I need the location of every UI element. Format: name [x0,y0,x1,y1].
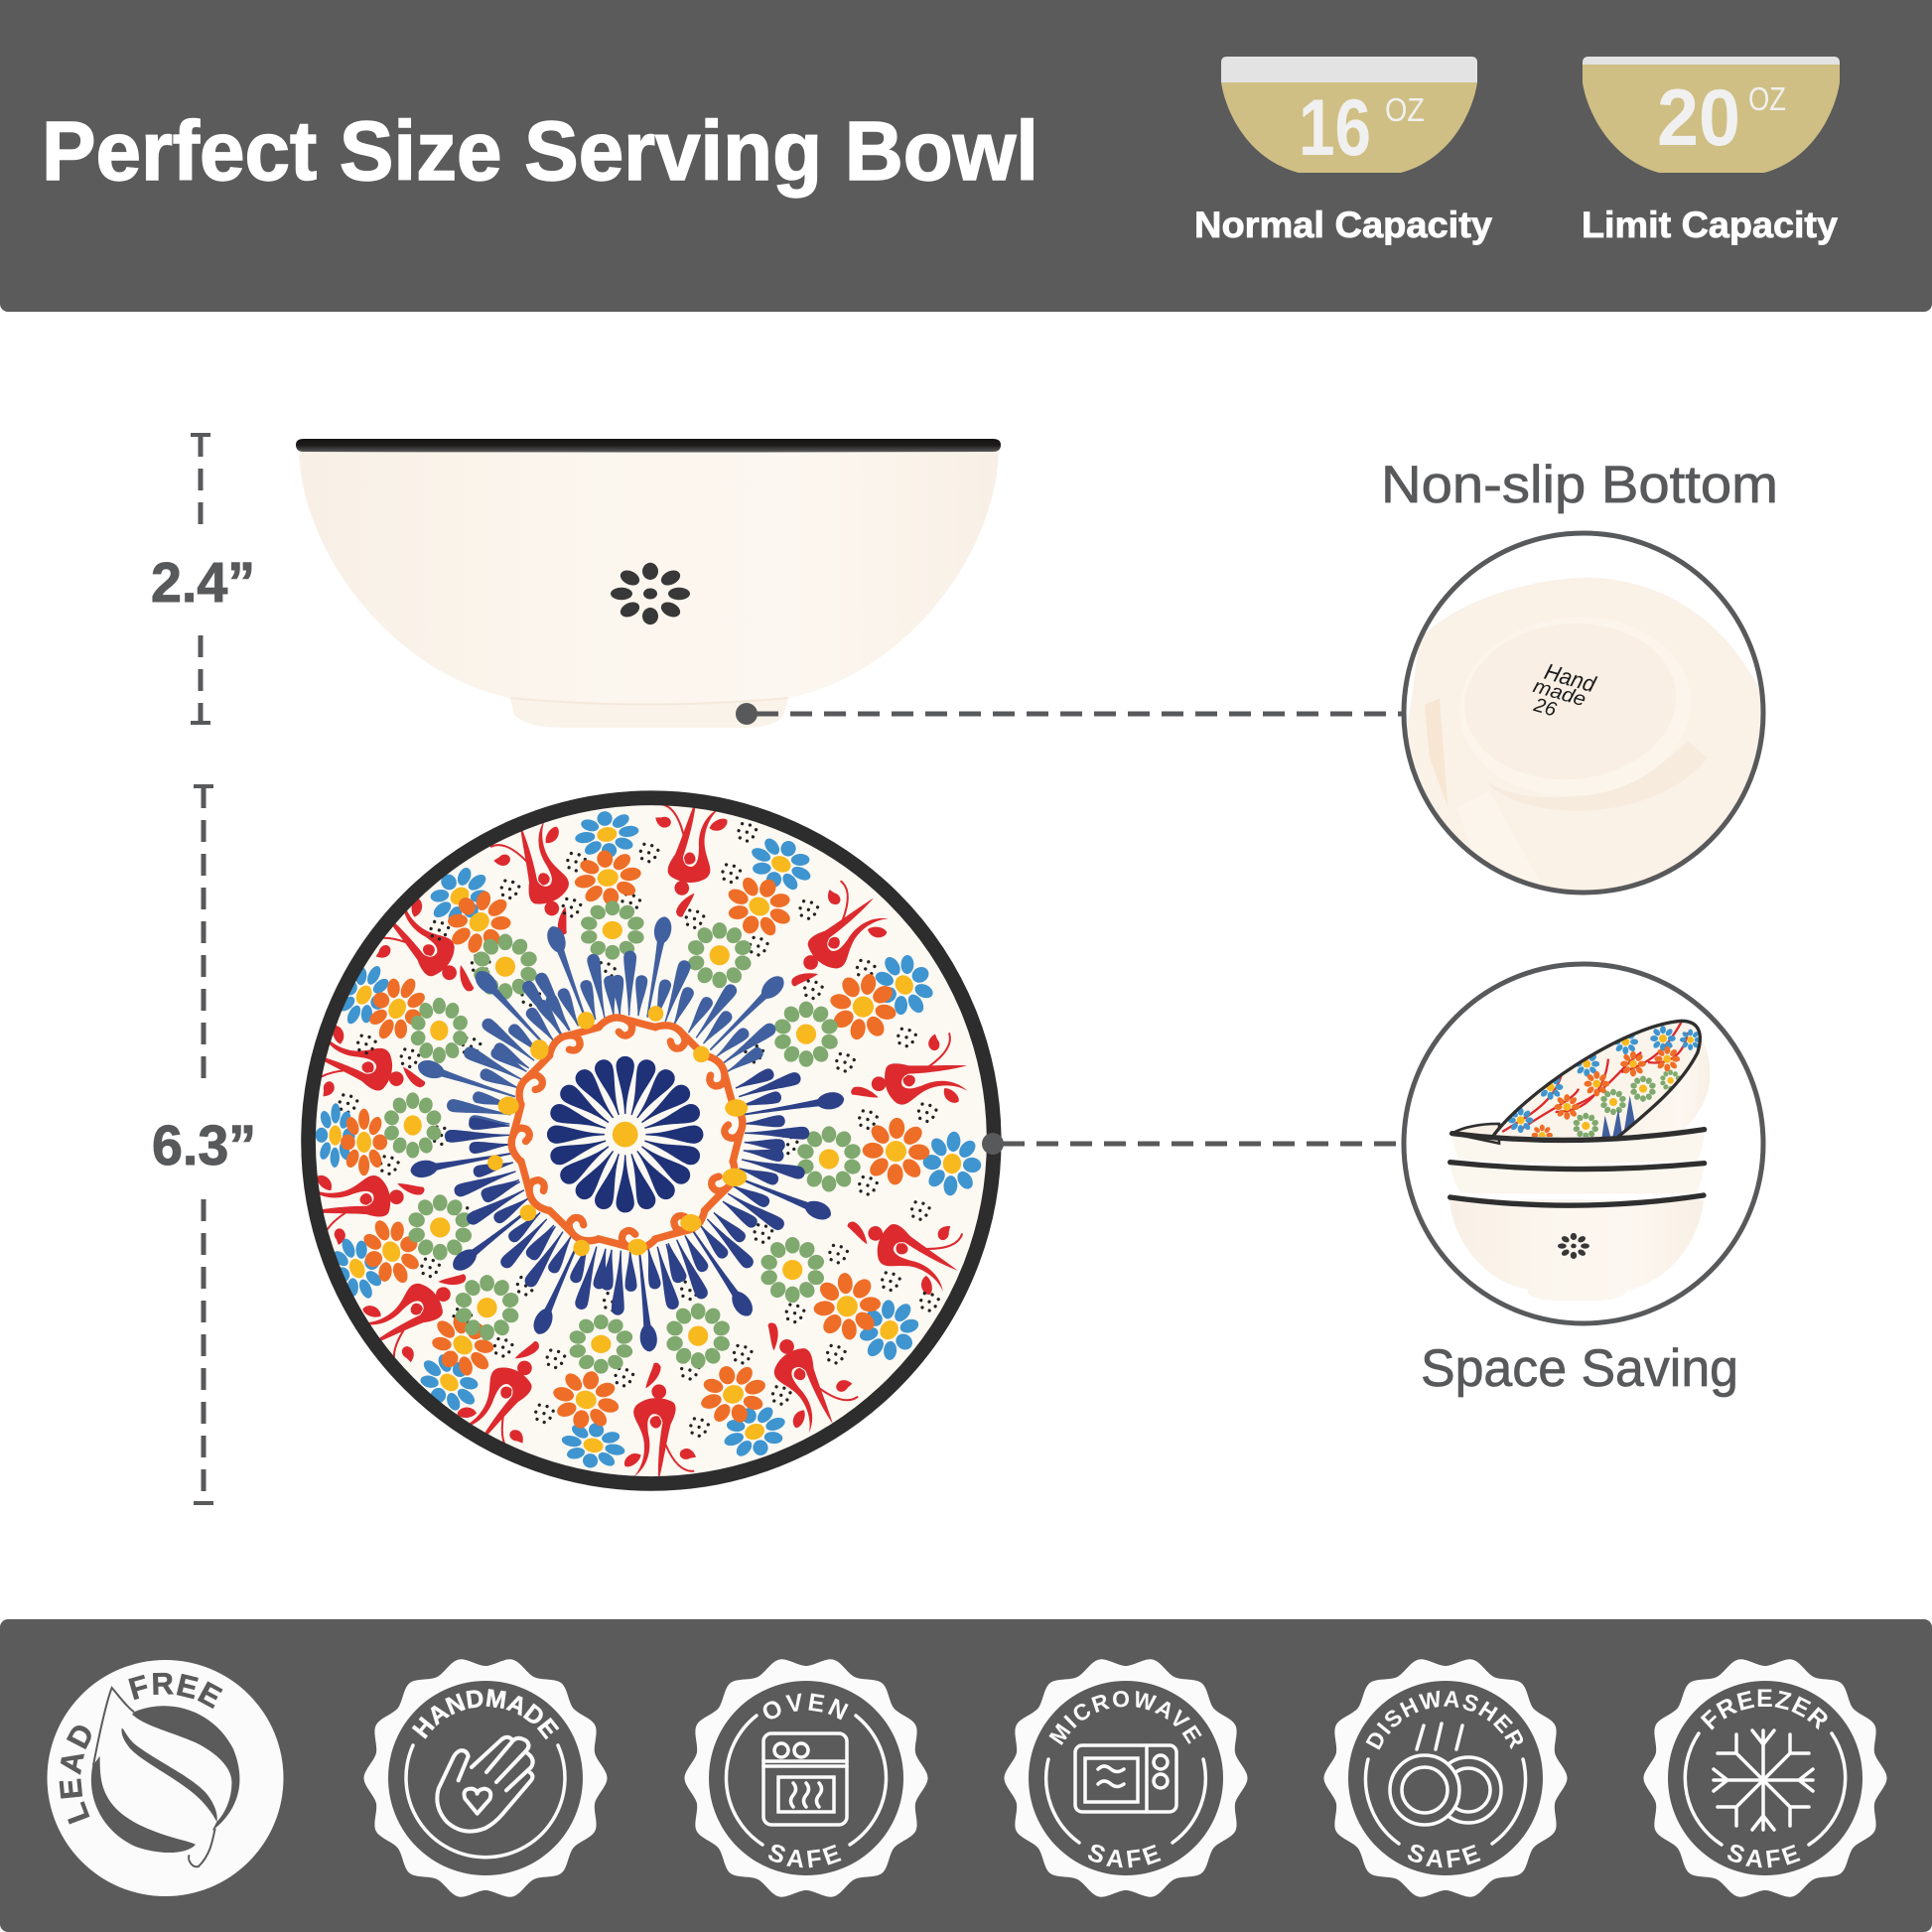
bottom bowl [1449,1199,1704,1301]
capacity bowl: 20 oz: OZ [1748,80,1786,117]
navy centre petals [547,1056,703,1212]
connector: bowl foot to non-slip detail [736,703,1405,725]
orange flowers [341,845,930,1437]
upper bowl front rim [1452,1130,1705,1140]
badge: handmade: HANDMADE [411,1689,560,1739]
detail circle: non-slip bottom [1403,533,1767,897]
height dimension: 2.4 inches [151,435,255,723]
hand-written maker mark [1533,663,1598,715]
capacity bowl: 16 oz: OZ [1385,91,1425,128]
heading: non-slip bottom: Non-slip Bottom [1381,456,1778,514]
label: limit capacity: Limit Capacity [1582,205,1838,245]
header band [0,0,1932,312]
tilted top bowl [1492,1021,1710,1146]
badge: freezer safe: SAFE [1727,1845,1801,1868]
badge: oven safe: OVEN [762,1694,849,1720]
icon: leaf [91,1688,239,1866]
badge: microwave safe: MICROWAVE [1048,1691,1202,1745]
icon: painted black flower [611,563,690,624]
badge: handmade [363,1659,608,1897]
badge: oven safe [685,1659,927,1897]
capacity bowl: 20 oz [1583,57,1840,173]
diameter dimension: 6.3 inches [152,786,256,1503]
badge: dishwasher safe [1324,1659,1567,1897]
height dimension: 2.4 inches: 2.4” [151,551,255,615]
icon: plates and water drops [1390,1724,1501,1825]
badge: oven safe: SAFE [768,1845,842,1868]
lower rims [1450,1163,1705,1205]
black dot clusters [336,820,941,1440]
capacity bowl: 16 oz: 16 [1299,83,1371,173]
icon: hand with heart [437,1737,533,1832]
badge: microwave safe [1005,1659,1247,1897]
badge: microwave safe: SAFE [1088,1845,1162,1868]
orange scroll ring [511,1018,743,1249]
green flowers [382,900,863,1374]
stacked bowls [1449,1021,1710,1301]
label: normal capacity: Normal Capacity [1194,205,1492,245]
hand-written maker mark: made [1531,675,1588,711]
bowl side view [296,439,1001,728]
footer band [0,1619,1932,1932]
black plate rim [309,798,994,1483]
diameter dimension: 6.3 inches: 6.3” [152,1114,256,1177]
decorated plate top view [271,768,1006,1506]
hand-written maker mark: Hand [1542,658,1599,698]
connector: plate rim to space saving detail [982,1133,1405,1155]
plate pattern [271,768,1006,1506]
badge: freezer safe [1644,1659,1886,1897]
badge: lead free: FREE [128,1672,222,1710]
badge: lead free [48,1660,284,1896]
badge: dishwasher safe: DISHWASHER [1366,1690,1523,1750]
outer blue flowers [315,807,984,1474]
yellow dots [487,1006,748,1256]
icon: oven [763,1733,847,1825]
detail circle: space saving stacked bowls [1404,964,1763,1323]
hand-written maker mark: 26 [1531,694,1560,722]
icon: snowflake [1714,1730,1813,1830]
blue radiating fans [403,909,851,1356]
icon: microwave [1075,1745,1176,1812]
title: Perfect Size Serving Bowl [42,104,1038,198]
badge: dishwasher safe: SAFE [1408,1845,1481,1868]
middle bowl [1450,1165,1705,1193]
capacity bowl: 16 oz [1221,57,1477,173]
badge: freezer safe: FREEZER [1700,1690,1828,1730]
badge: lead free: LEAD [60,1725,91,1825]
capacity bowl: 20 oz: 20 [1657,73,1740,163]
red tulip motifs [271,768,1006,1506]
upper bowl [1452,1124,1705,1164]
heading: space saving: Space Saving [1421,1339,1738,1398]
